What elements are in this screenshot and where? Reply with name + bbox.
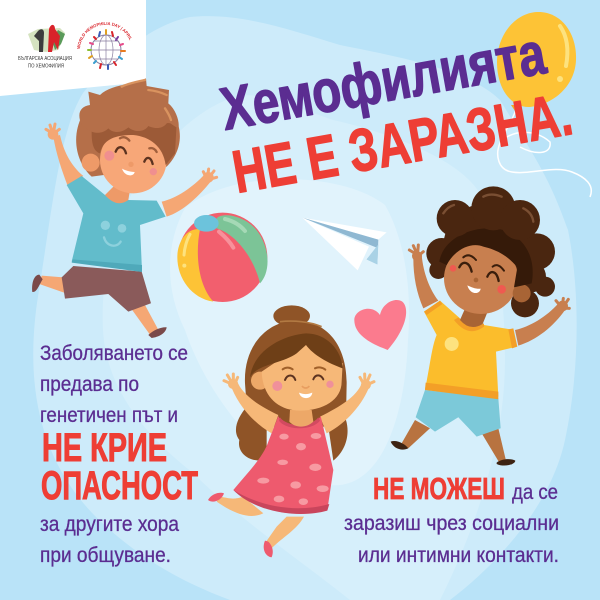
right text block	[344, 471, 559, 567]
red emphasis: НЕ КРИЕ ОПАСНОСТ	[41, 426, 198, 508]
boy legs and shoes	[32, 275, 167, 338]
child legs and shoes	[391, 420, 515, 466]
red emphasis: НЕ КРИЕ ОПАСНОСТ: ОПАСНОСТ	[41, 464, 198, 508]
logo: Bulgarian haemophilia association	[18, 25, 72, 70]
boy arms	[46, 124, 217, 217]
girl character	[208, 305, 374, 557]
white logo panel	[0, 0, 146, 96]
boy character	[32, 78, 217, 338]
beach ball	[177, 213, 268, 302]
girl back hair	[236, 305, 348, 461]
child arms	[409, 245, 569, 346]
child head	[426, 186, 555, 327]
girl dress	[233, 416, 333, 514]
red emphasis: НЕ КРИЕ ОПАСНОСТ: НЕ КРИЕ	[42, 426, 167, 470]
boy t-shirt	[67, 176, 166, 272]
left text block: Заболяването се	[40, 341, 188, 365]
girl arms	[224, 374, 374, 433]
boy head	[76, 78, 180, 203]
logo: Bulgarian haemophilia association: БЪЛГАРСКА АСОЦИАЦИЯ	[18, 56, 72, 62]
logo: Bulgarian haemophilia association: ПО ХЕМОФИЛИЯ	[28, 64, 64, 70]
girl head	[250, 333, 343, 427]
left text block: предава по	[40, 372, 139, 396]
boy shorts	[62, 266, 151, 312]
right text block: да се	[512, 480, 558, 504]
left text block: за другите хора	[40, 512, 179, 536]
paper plane	[302, 218, 387, 270]
left text block: генетичен път и	[40, 403, 178, 427]
left text block	[40, 341, 198, 567]
child t-shirt	[424, 301, 517, 399]
child shorts	[416, 390, 501, 437]
left text block: при общуване.	[40, 543, 171, 567]
logo: World Hemophilia Day	[77, 22, 132, 70]
right text block: НЕ МОЖЕШ	[373, 471, 505, 506]
heart	[354, 300, 406, 350]
right text block: заразиш чрез социални	[344, 511, 559, 535]
girl legs and shoes	[208, 493, 304, 557]
right text block: или интимни контакти.	[358, 543, 559, 567]
balloon	[497, 12, 591, 197]
curly-haired child character	[391, 186, 569, 466]
title	[216, 19, 577, 206]
